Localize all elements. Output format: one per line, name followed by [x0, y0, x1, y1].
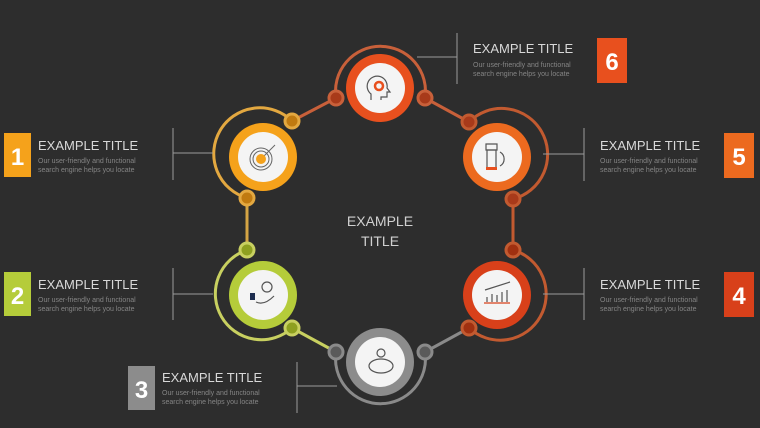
label 5: Our user-friendly and functional — [600, 158, 698, 165]
label 4: EXAMPLE TITLE — [600, 277, 701, 292]
label 5: EXAMPLE TITLE — [600, 138, 701, 153]
center title: TITLE — [361, 233, 399, 249]
label 6: search engine helps you locate — [473, 71, 570, 78]
label 5 — [600, 133, 754, 178]
icon: head gear — [367, 76, 390, 100]
node 6 — [329, 46, 432, 122]
icon: chess — [486, 144, 504, 168]
label 6: Our user-friendly and functional — [473, 62, 571, 69]
label 4 — [600, 272, 754, 317]
label 3: 3 — [135, 377, 148, 404]
label 3: search engine helps you locate — [162, 399, 259, 406]
icon: target — [250, 145, 275, 170]
brackets — [173, 33, 584, 413]
label 2: search engine helps you locate — [38, 306, 135, 313]
label 2: EXAMPLE TITLE — [38, 277, 139, 292]
label 3 — [128, 366, 263, 410]
icon: hand coin — [256, 282, 274, 303]
label 5: 5 — [732, 144, 746, 171]
label 1: EXAMPLE TITLE — [38, 138, 139, 153]
label 1: Our user-friendly and functional — [38, 158, 136, 165]
label 1 — [4, 133, 139, 177]
label 4: 4 — [732, 283, 746, 310]
icon: piggy bank — [369, 349, 393, 373]
node 4 — [462, 243, 546, 340]
center title: EXAMPLE — [347, 213, 413, 229]
icon: chart — [484, 282, 510, 303]
label 2: Our user-friendly and functional — [38, 297, 136, 304]
label 1: search engine helps you locate — [38, 167, 135, 174]
label 3: EXAMPLE TITLE — [162, 370, 263, 385]
label 6: 6 — [605, 49, 619, 76]
label 6: EXAMPLE TITLE — [473, 41, 574, 56]
label 5: search engine helps you locate — [600, 167, 697, 174]
node 5 — [462, 108, 548, 206]
node 1 — [214, 108, 299, 205]
label 4: search engine helps you locate — [600, 306, 697, 313]
label 2 — [4, 272, 139, 316]
label 6 — [473, 38, 627, 83]
label 1: 1 — [11, 144, 24, 171]
label 2: 2 — [11, 283, 24, 310]
label 3: Our user-friendly and functional — [162, 390, 260, 397]
node 3 — [329, 328, 432, 404]
node 2 — [215, 243, 299, 340]
label 4: Our user-friendly and functional — [600, 297, 698, 304]
connectors — [247, 98, 513, 352]
center title — [347, 213, 413, 249]
